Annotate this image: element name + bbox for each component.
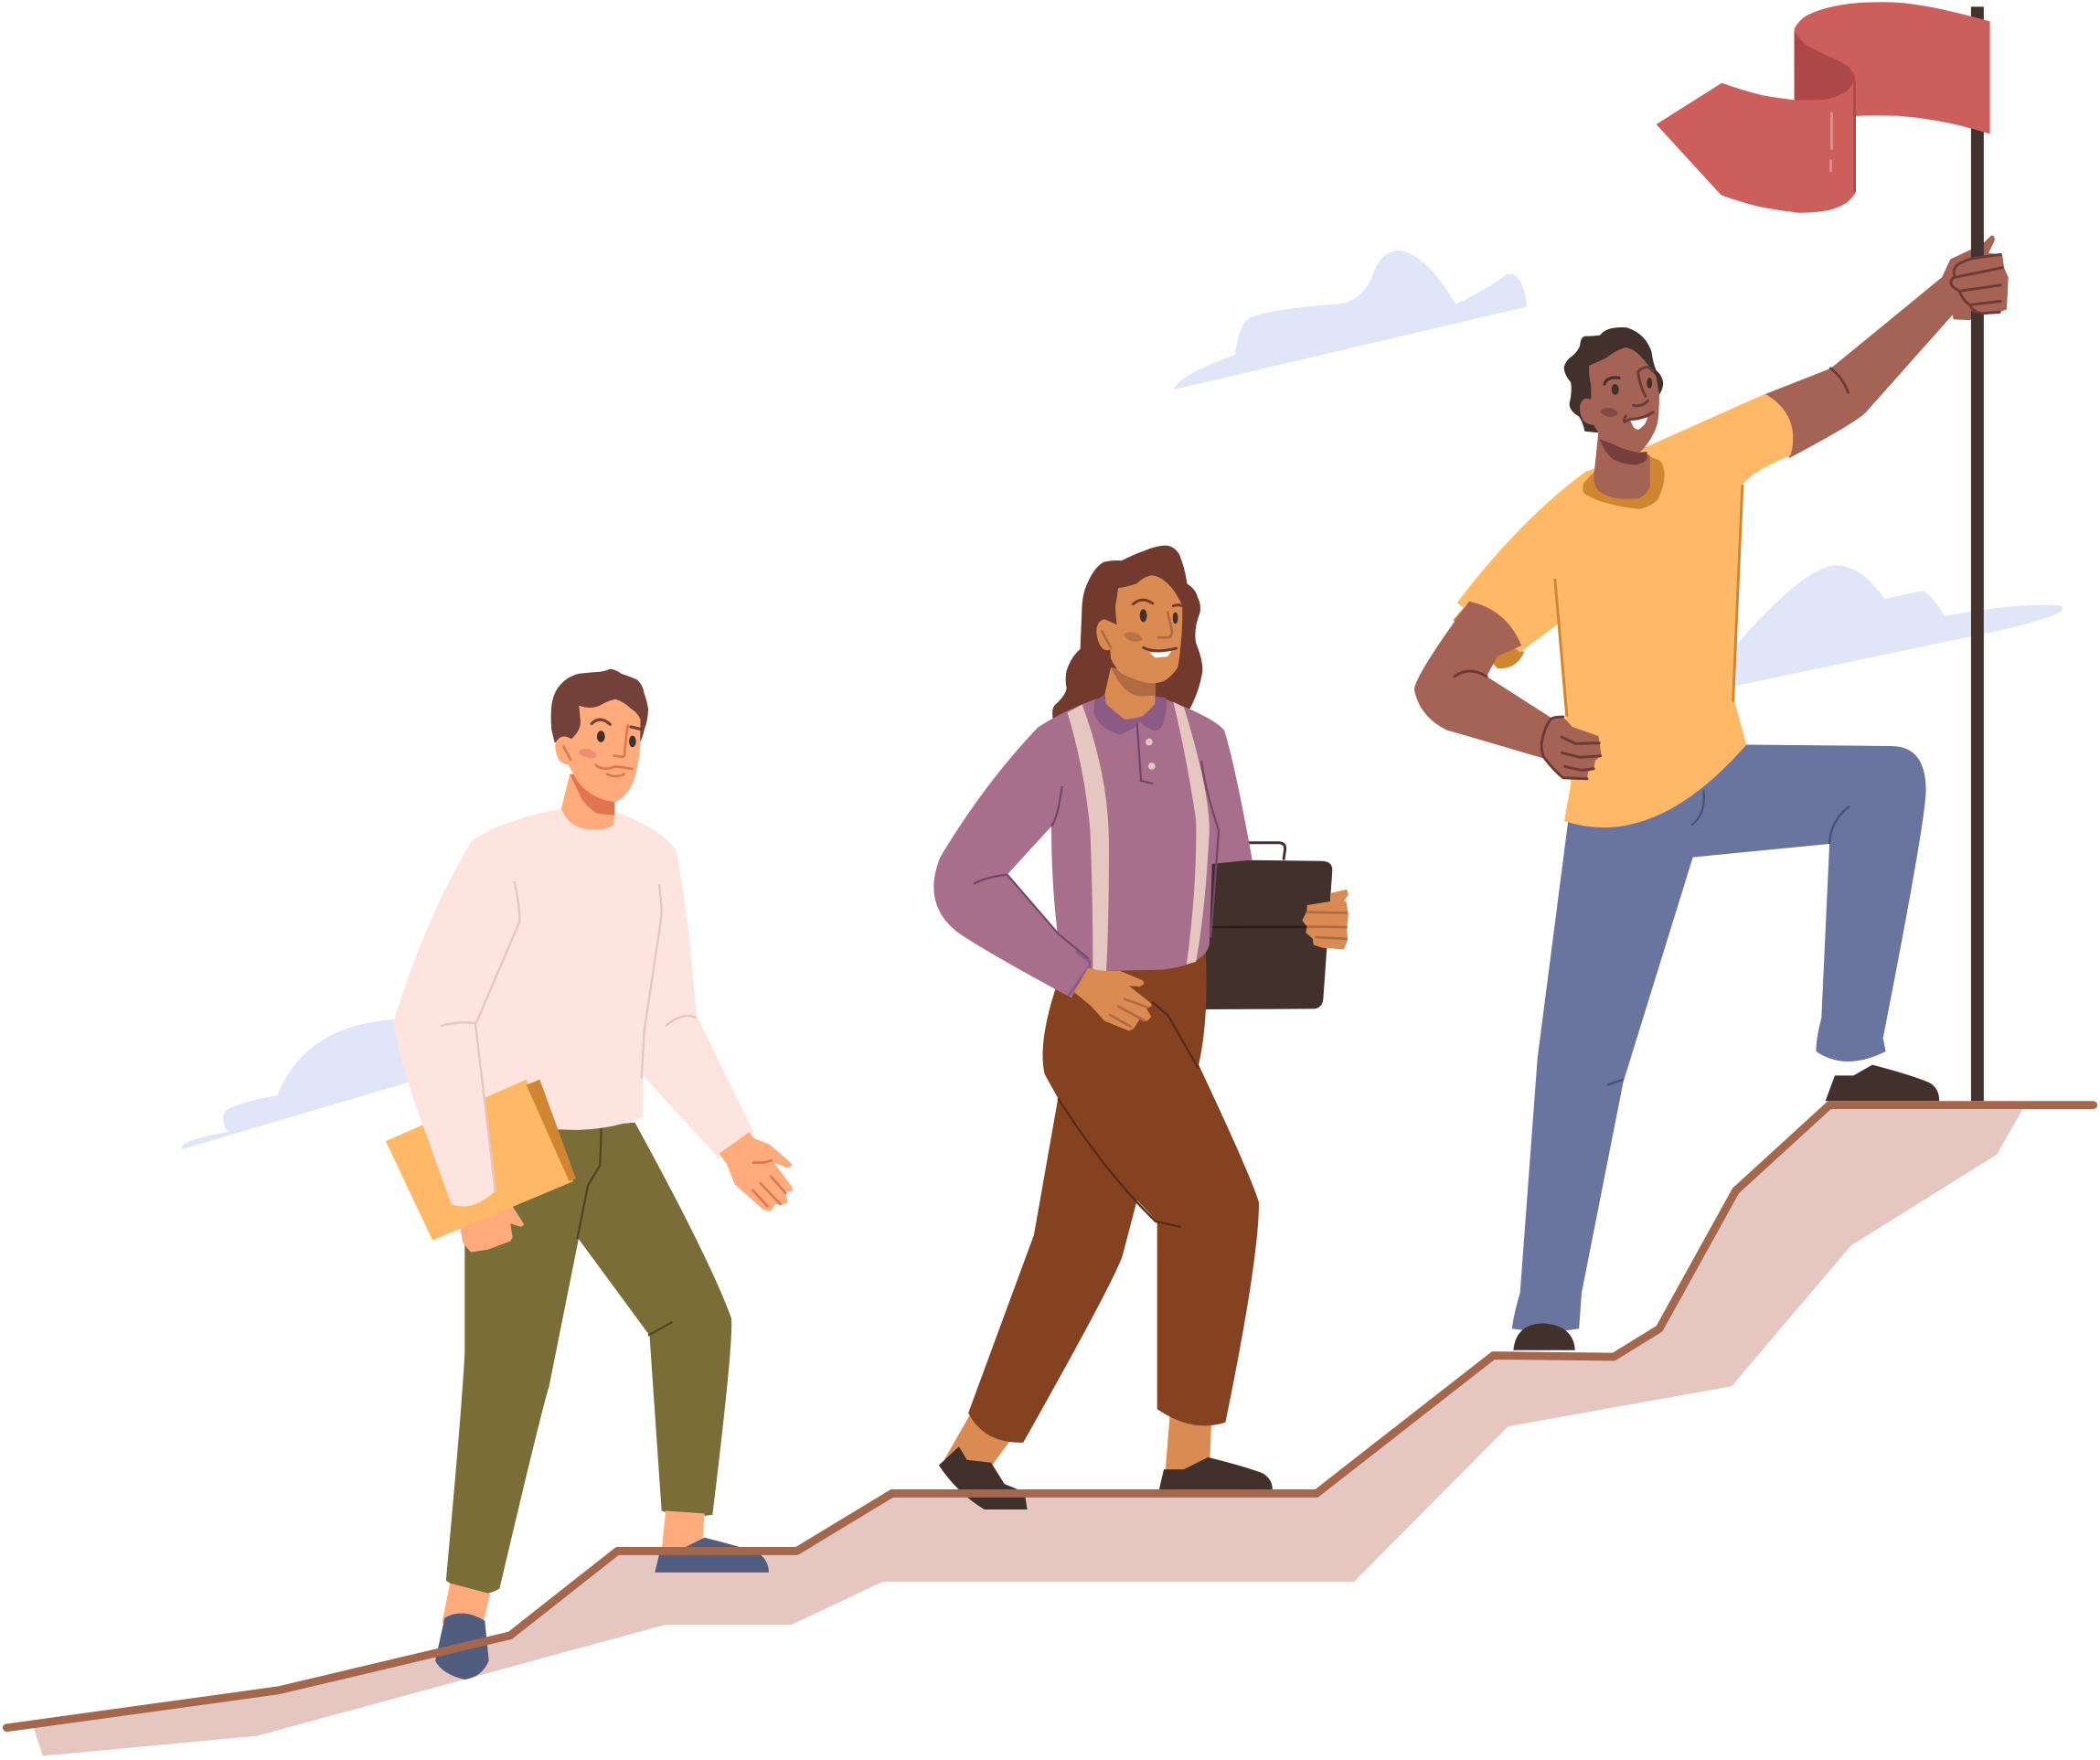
- woman hand on waist: [1074, 967, 1152, 1030]
- left man hand under book: [460, 1205, 524, 1252]
- woman trousers: [968, 944, 1259, 1443]
- left man back shoe: [655, 1538, 769, 1573]
- right man raised arm and thumb: [1763, 235, 2008, 458]
- left man trousers: [446, 1123, 731, 1595]
- left man sweater: [394, 809, 754, 1207]
- right man collar: [1583, 456, 1665, 509]
- right man front shoe: [1826, 1065, 1939, 1101]
- woman face: [1096, 575, 1182, 683]
- woman shoes: [939, 1446, 1273, 1509]
- woman ankles: [944, 1406, 1212, 1473]
- right man facial features: [1600, 367, 1653, 430]
- left man facial features: [564, 720, 641, 776]
- right man sleeve cuff: [1453, 602, 1524, 668]
- right man chin shadow: [1599, 439, 1647, 464]
- woman hair: [1052, 546, 1202, 720]
- left man book: [386, 1080, 576, 1241]
- right man back shoe: [1513, 1323, 1575, 1350]
- woman blouse collar: [1094, 695, 1167, 734]
- cloud: right: [1736, 565, 2063, 686]
- staircase path line: [6, 1105, 2094, 1728]
- staircase shadow: [34, 1105, 2025, 1756]
- woman neck: [1104, 667, 1156, 720]
- right man fingers gripping pole: [1831, 254, 2009, 392]
- person: right man with raised flag: [1414, 254, 2009, 1350]
- person: left man with book: [386, 669, 793, 1680]
- briefcase: [1199, 843, 1332, 1009]
- left man sleeve over book: [394, 1020, 495, 1207]
- right man hand on hip: [1455, 671, 1602, 779]
- right man trousers: [1512, 745, 1926, 1331]
- left man neck: [561, 774, 614, 830]
- person: centre woman with briefcase: [933, 546, 1348, 1509]
- cloud: left: [182, 1019, 418, 1149]
- cloud: upper centre: [1173, 251, 1527, 389]
- right man face: [1580, 347, 1659, 453]
- left man face: [555, 699, 641, 802]
- right man neck: [1594, 432, 1650, 499]
- woman blouse details: [974, 723, 1219, 996]
- left man open hand: [720, 1132, 793, 1211]
- left man neck shadow: [570, 774, 614, 816]
- right man T-shirt: [1457, 394, 1793, 827]
- woman facial features: [1102, 600, 1182, 657]
- left man hair: [551, 669, 648, 750]
- woman suspenders: [1068, 702, 1210, 971]
- right man left arm: [1414, 602, 1553, 758]
- left man ankles: [442, 1510, 705, 1627]
- flag: [1657, 2, 1990, 213]
- woman hand on briefcase: [1302, 890, 1348, 949]
- right man hair: [1564, 327, 1663, 435]
- woman neck shadow: [1111, 667, 1156, 697]
- woman blouse: [933, 699, 1253, 997]
- flag pole: [1971, 6, 1984, 1101]
- left man front shoe: [435, 1613, 489, 1680]
